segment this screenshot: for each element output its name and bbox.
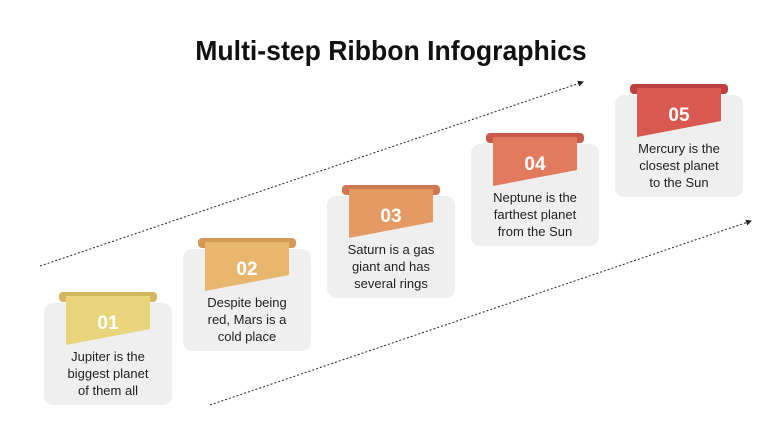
- arrow: bottom dotted: [210, 221, 751, 405]
- step 02: Despite being: [207, 295, 287, 310]
- step 01: biggest planet: [68, 366, 149, 381]
- step 02: [183, 238, 311, 351]
- step 03: [327, 185, 455, 298]
- step 02: 02: [236, 259, 258, 280]
- step 04: from the Sun: [498, 224, 572, 239]
- step 04: [471, 133, 599, 246]
- step 05: to the Sun: [649, 175, 709, 190]
- step 04: 04: [524, 154, 546, 175]
- step 01: [44, 292, 172, 405]
- step 01: Jupiter is the: [71, 349, 145, 364]
- step 04: Neptune is the: [493, 190, 577, 205]
- title: Multi-step Ribbon Infographics: [195, 34, 587, 66]
- step 03: Saturn is a gas: [348, 242, 435, 257]
- step 05: closest planet: [639, 158, 719, 173]
- step 03: several rings: [354, 276, 428, 291]
- step 01: 01: [97, 313, 119, 334]
- step 01: of them all: [78, 383, 138, 398]
- step 05: 05: [668, 105, 690, 126]
- step 04: farthest planet: [494, 207, 577, 222]
- step 05: [615, 84, 743, 197]
- step 02: cold place: [218, 329, 276, 344]
- step 03: giant and has: [352, 259, 431, 274]
- arrow: top dotted: [40, 82, 583, 266]
- step 05: Mercury is the: [638, 141, 720, 156]
- step 02: red, Mars is a: [208, 312, 287, 327]
- step 03: 03: [380, 206, 402, 227]
